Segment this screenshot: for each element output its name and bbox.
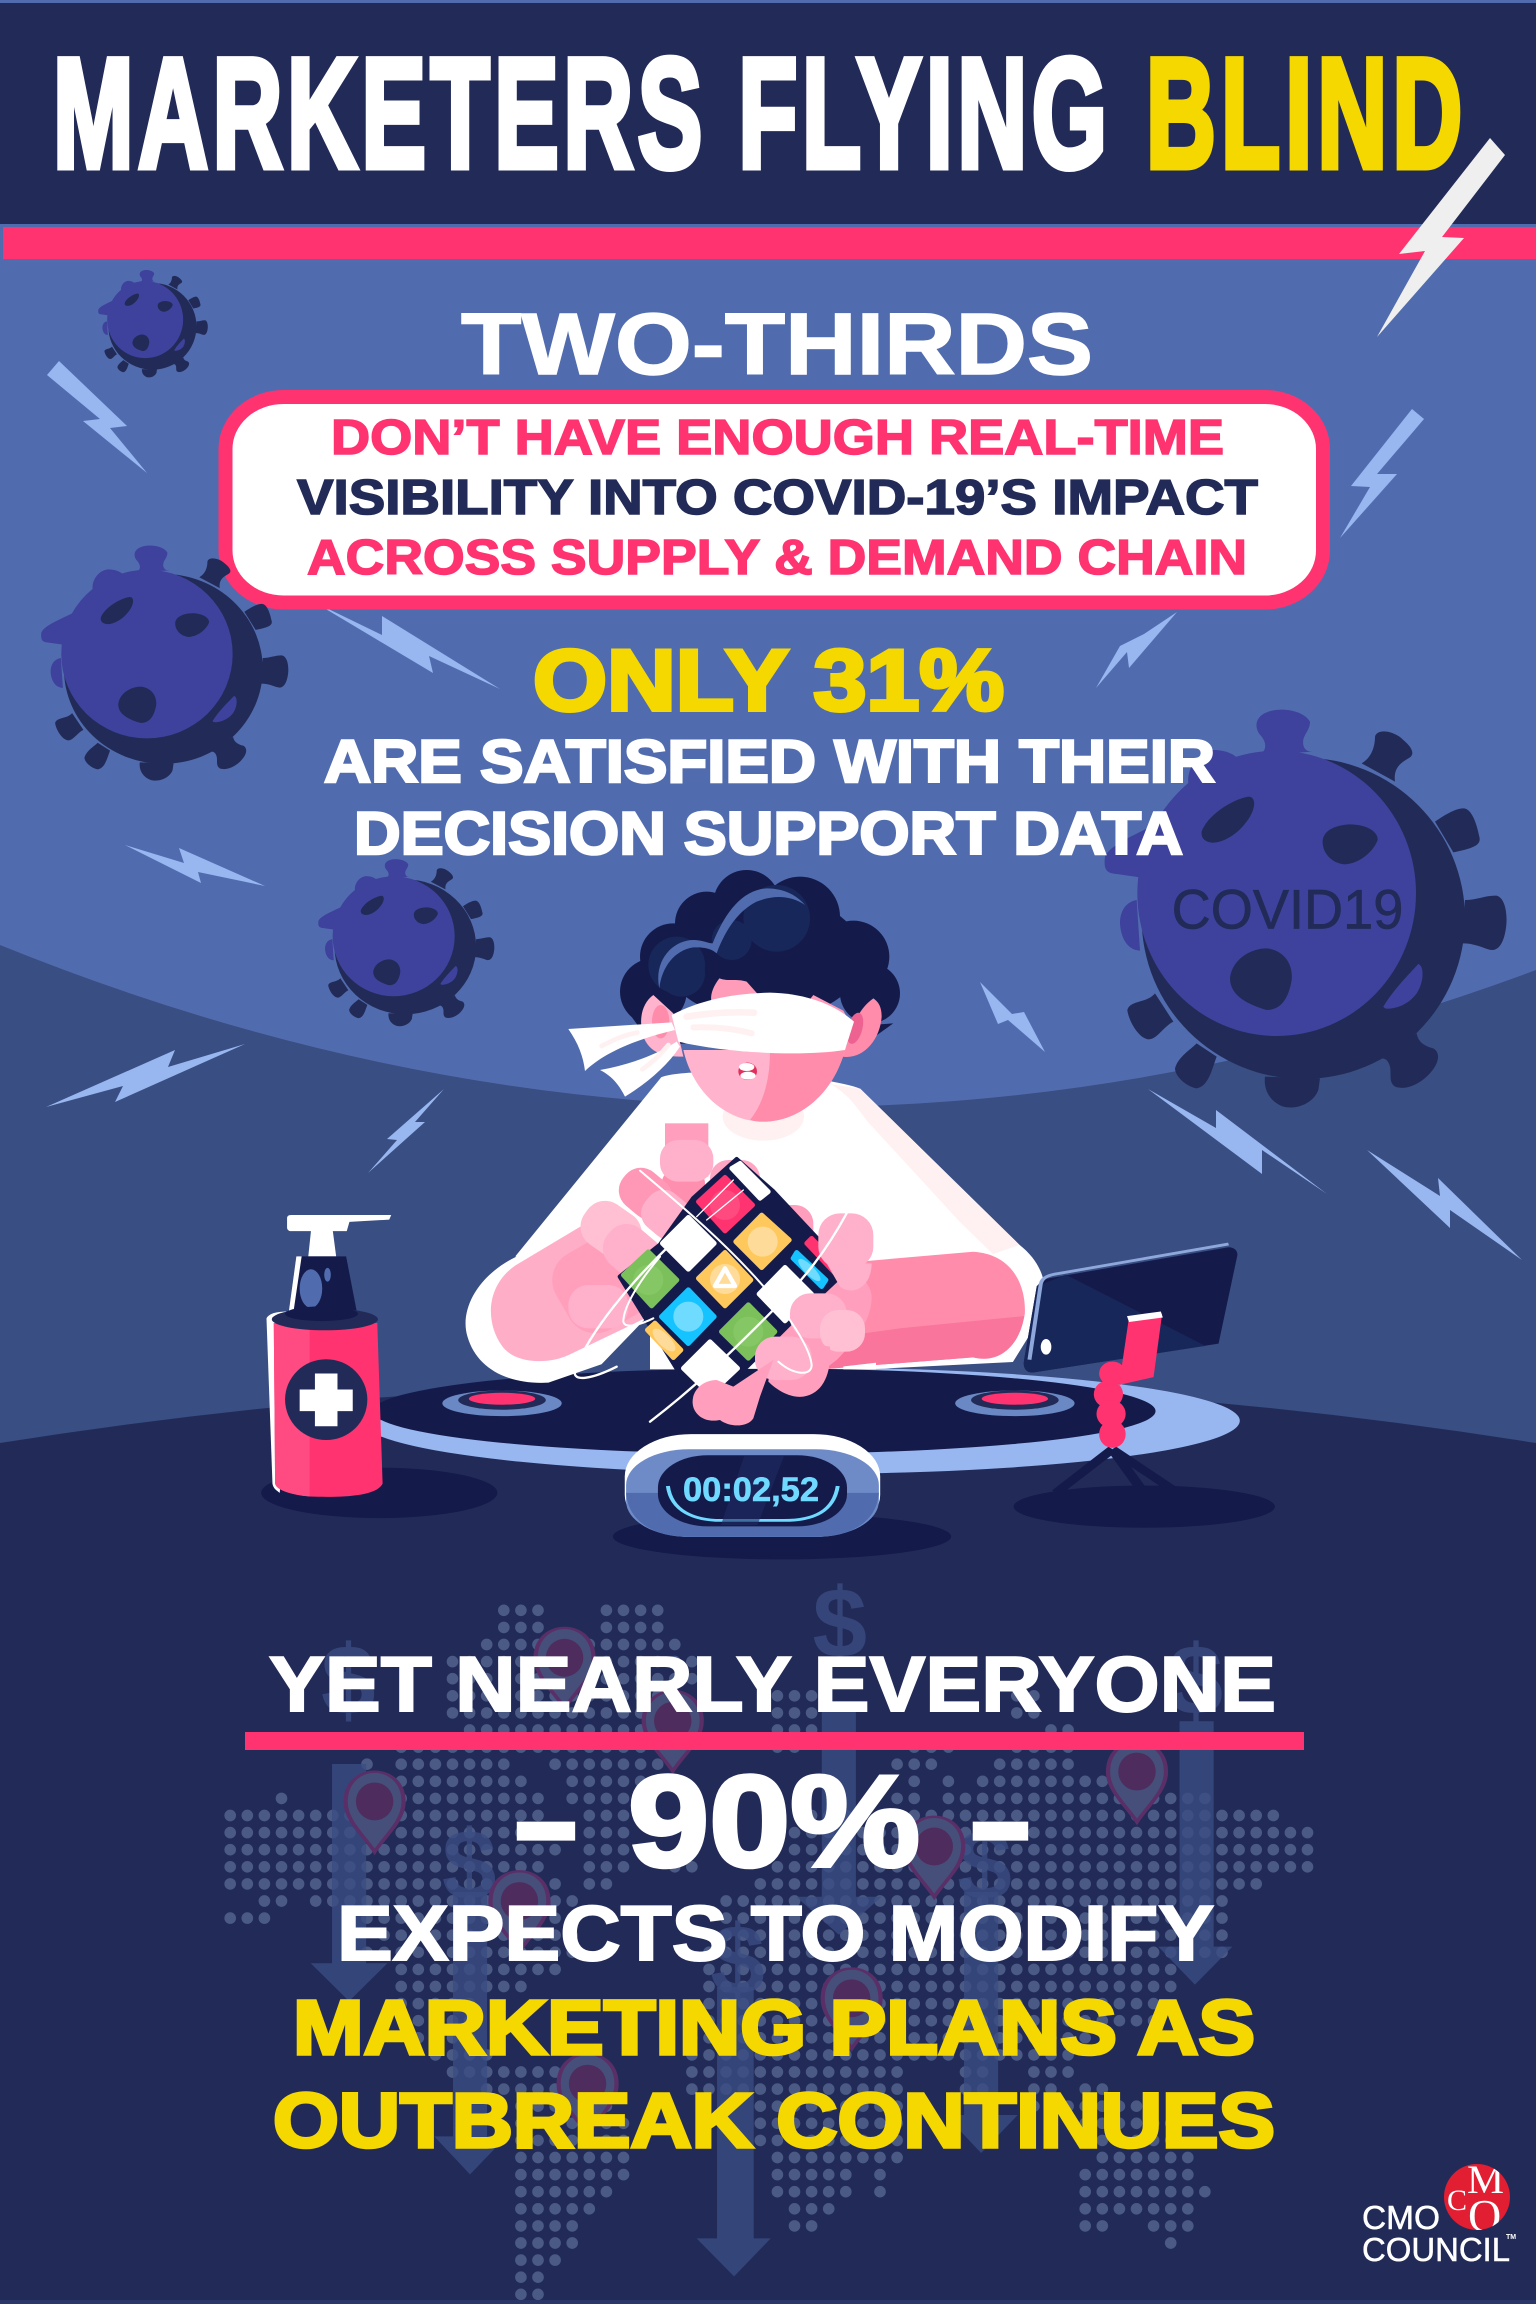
left arm bbox=[491, 1222, 655, 1361]
callout box bbox=[226, 397, 1323, 602]
dollar signs: $ bbox=[812, 1567, 867, 1679]
stat: only 31%: ONLY 31% bbox=[533, 633, 1004, 729]
hands and puzzle cube bbox=[541, 1123, 900, 1425]
heading: yet nearly everyone: YET NEARLY EVERYONE bbox=[269, 1640, 1276, 1728]
logo: CMO Council: O bbox=[1468, 2190, 1501, 2241]
dollar signs: $ bbox=[442, 1809, 496, 1921]
blindfold bbox=[672, 993, 854, 1053]
title: BLIND bbox=[1146, 26, 1462, 201]
bottle neck bbox=[288, 1256, 357, 1315]
dollar signs bbox=[321, 1567, 1223, 2015]
hair highlights bbox=[648, 885, 810, 997]
tripod legs bbox=[1056, 1449, 1172, 1493]
background: mid curved band bbox=[0, 945, 1536, 1500]
right palm bbox=[760, 1268, 872, 1393]
stat: 90%: – bbox=[516, 1748, 576, 1894]
phone edge bbox=[1029, 1244, 1229, 1360]
lightning bolts bbox=[46, 361, 1522, 1260]
world map of dots with pins and falling dollar arrows bbox=[230, 1567, 1308, 2294]
phone clamp bbox=[1119, 1314, 1162, 1385]
dotted world map bbox=[230, 1610, 1308, 2294]
text: marketing plans bbox=[273, 1985, 1275, 2164]
dollar signs: $ bbox=[710, 1904, 765, 2015]
pink divider bbox=[245, 1732, 1304, 1750]
sanitizer bottle bbox=[266, 1215, 391, 1497]
text: marketing plans: MARKETING PLANS AS bbox=[293, 1985, 1255, 2071]
callout text line 2: VISIBILITY INTO COVID-19’S IMPACT bbox=[297, 471, 1258, 525]
stat: 90%: – bbox=[972, 1748, 1029, 1894]
bottle body bbox=[266, 1311, 290, 1493]
medical cross badge bbox=[285, 1359, 367, 1440]
hair bbox=[620, 870, 900, 1047]
heading: two-thirds: TWO-THIRDS bbox=[461, 296, 1093, 393]
table and shadows bbox=[261, 1367, 1275, 1559]
text: outbreak continues: OUTBREAK CONTINUES bbox=[273, 2078, 1275, 2164]
stat description bbox=[324, 728, 1215, 867]
stat description: ARE SATISFIED WITH THEIR bbox=[324, 728, 1215, 795]
face bbox=[683, 1050, 845, 1122]
timer device bbox=[625, 1434, 880, 1537]
falling arrows bbox=[311, 1712, 1232, 2276]
logo: CMO Council: M bbox=[1467, 2157, 1504, 2202]
shirt stripe gaps bbox=[650, 1330, 677, 1369]
shirt bbox=[515, 1072, 1045, 1369]
background: lower navy panel bbox=[0, 1382, 1536, 2304]
virus: mid left bbox=[318, 859, 494, 1026]
mouth bbox=[738, 1063, 757, 1080]
bottom edge strip bbox=[0, 2300, 1536, 2304]
ears bbox=[641, 995, 683, 1057]
phone back bbox=[1024, 1247, 1237, 1373]
virus: small top left bbox=[98, 270, 208, 377]
back hand shapes bbox=[665, 1123, 708, 1177]
virus: large COVID19 bbox=[1105, 710, 1507, 1108]
logo: CMO Council: C bbox=[1447, 2184, 1467, 2217]
left sleeve bbox=[466, 1217, 655, 1383]
motion swooshes bbox=[575, 1171, 847, 1422]
timer readout: 00:02,52 bbox=[683, 1471, 819, 1509]
right arm bbox=[827, 1252, 1025, 1369]
dollar signs: $ bbox=[321, 1624, 375, 1736]
dollar signs: $ bbox=[957, 1809, 1012, 1921]
location pins bbox=[346, 1628, 1166, 2134]
clamp beads bbox=[1094, 1362, 1126, 1448]
shirt shade bbox=[830, 1084, 1020, 1254]
blindfold tails bbox=[568, 1022, 680, 1097]
puzzle cube bbox=[620, 1159, 847, 1400]
front fingers bbox=[818, 1213, 873, 1268]
pump head bbox=[287, 1215, 391, 1256]
logo: CMO Council: CMO bbox=[1362, 2199, 1440, 2236]
stat: 90% bbox=[516, 1748, 1029, 1894]
stat: 90%: 90% bbox=[628, 1748, 920, 1894]
torso and arms bbox=[466, 1072, 1045, 1383]
stat description: DECISION SUPPORT DATA bbox=[354, 800, 1183, 867]
header band bbox=[0, 3, 1536, 259]
virus: large left bbox=[41, 546, 288, 781]
dollar signs: $ bbox=[1168, 1624, 1223, 1736]
logo: CMO Council: COUNCIL bbox=[1362, 2231, 1510, 2268]
blindfolded head bbox=[568, 870, 900, 1141]
phone on tripod bbox=[1024, 1244, 1237, 1493]
callout text line 3: ACROSS SUPPLY & DEMAND CHAIN bbox=[307, 531, 1247, 585]
text: expects to modify: EXPECTS TO MODIFY bbox=[337, 1889, 1214, 1977]
forehead bbox=[711, 978, 847, 1017]
virus: large COVID19: COVID19 bbox=[1172, 878, 1403, 941]
logo: CMO Council bbox=[1363, 2164, 1516, 2262]
neck shadow bbox=[723, 1093, 804, 1141]
title: MARKETERS FLYING bbox=[53, 26, 1107, 201]
logo: CMO Council: TM bbox=[1506, 2234, 1516, 2241]
lens bbox=[1041, 1339, 1051, 1355]
icon: white lightning bolt bbox=[1377, 138, 1505, 337]
right forearm join bbox=[847, 1260, 900, 1337]
callout text line 1: DON’T HAVE ENOUGH REAL-TIME bbox=[331, 411, 1224, 465]
